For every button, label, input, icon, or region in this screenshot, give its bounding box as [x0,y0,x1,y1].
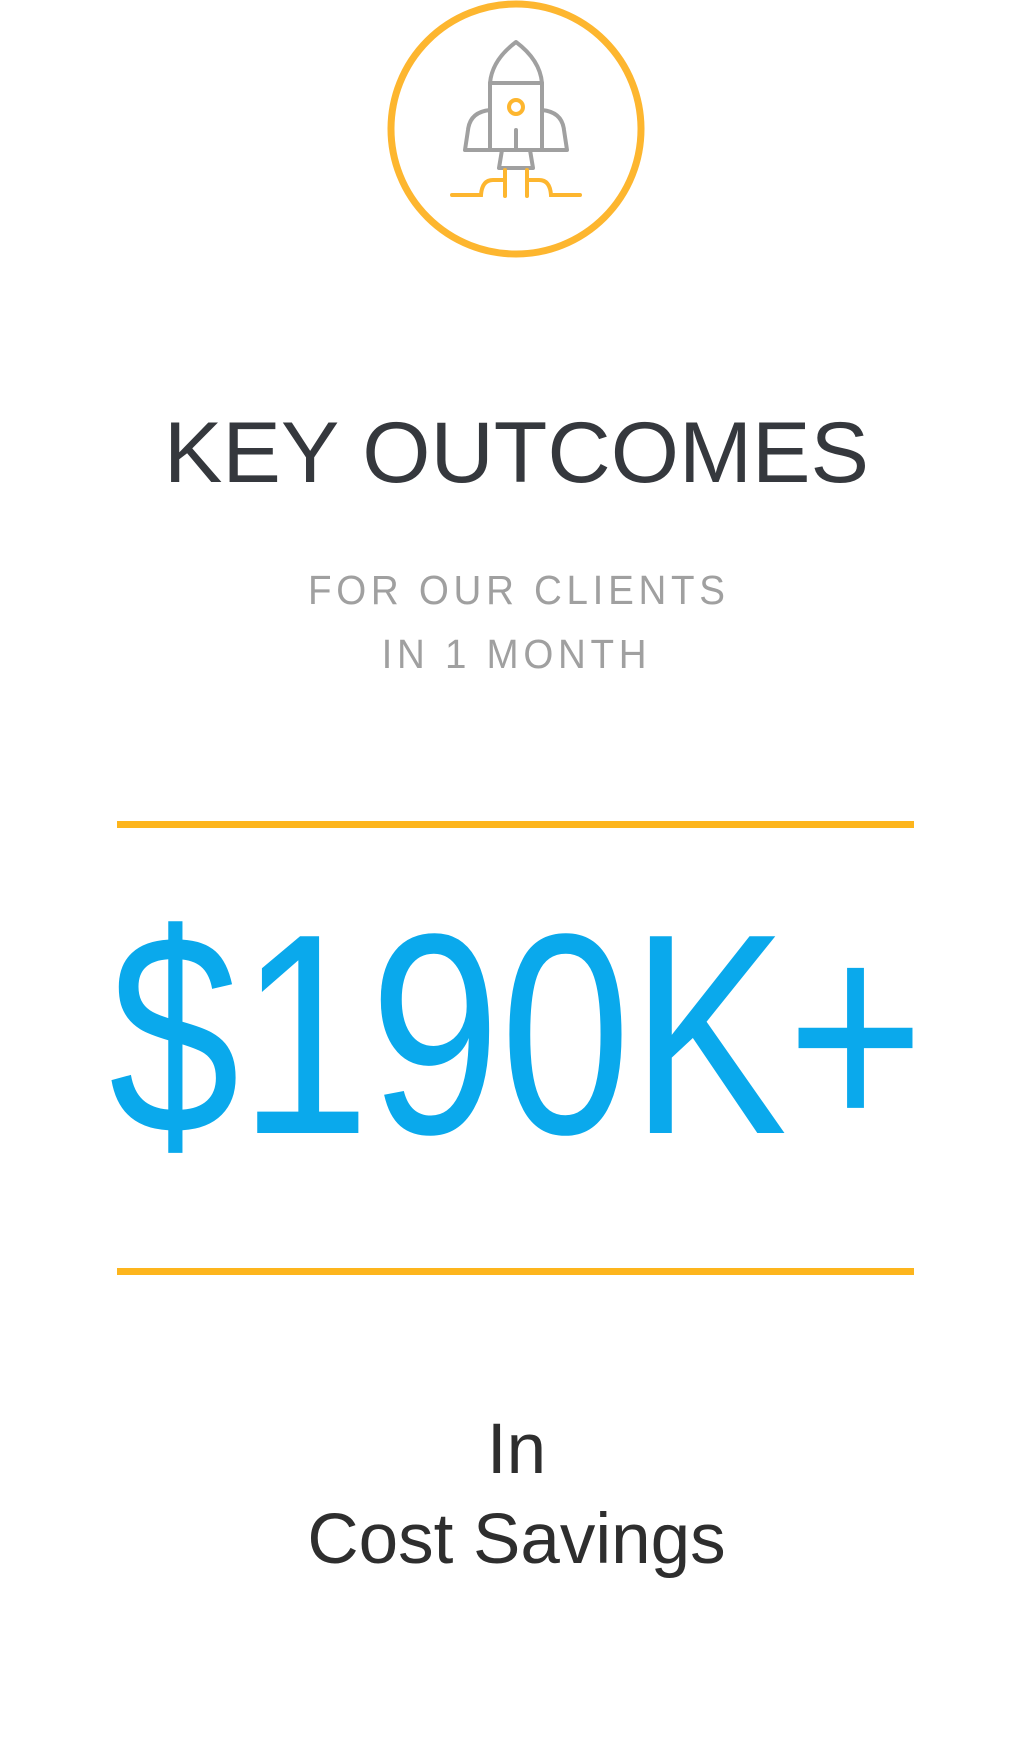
divider bottom [117,1268,914,1275]
caption [307,1410,726,1579]
title: KEY OUTCOMES [164,405,869,501]
divider top [117,821,914,828]
caption: Cost Savings [307,1500,726,1579]
subtitle: FOR OUR CLIENTS [308,567,730,613]
caption: In [487,1410,546,1489]
big number: $190K+ [109,874,924,1194]
subtitle [308,567,730,677]
icon: rocket in circle [388,0,644,258]
subtitle: IN 1 MONTH [382,631,651,677]
